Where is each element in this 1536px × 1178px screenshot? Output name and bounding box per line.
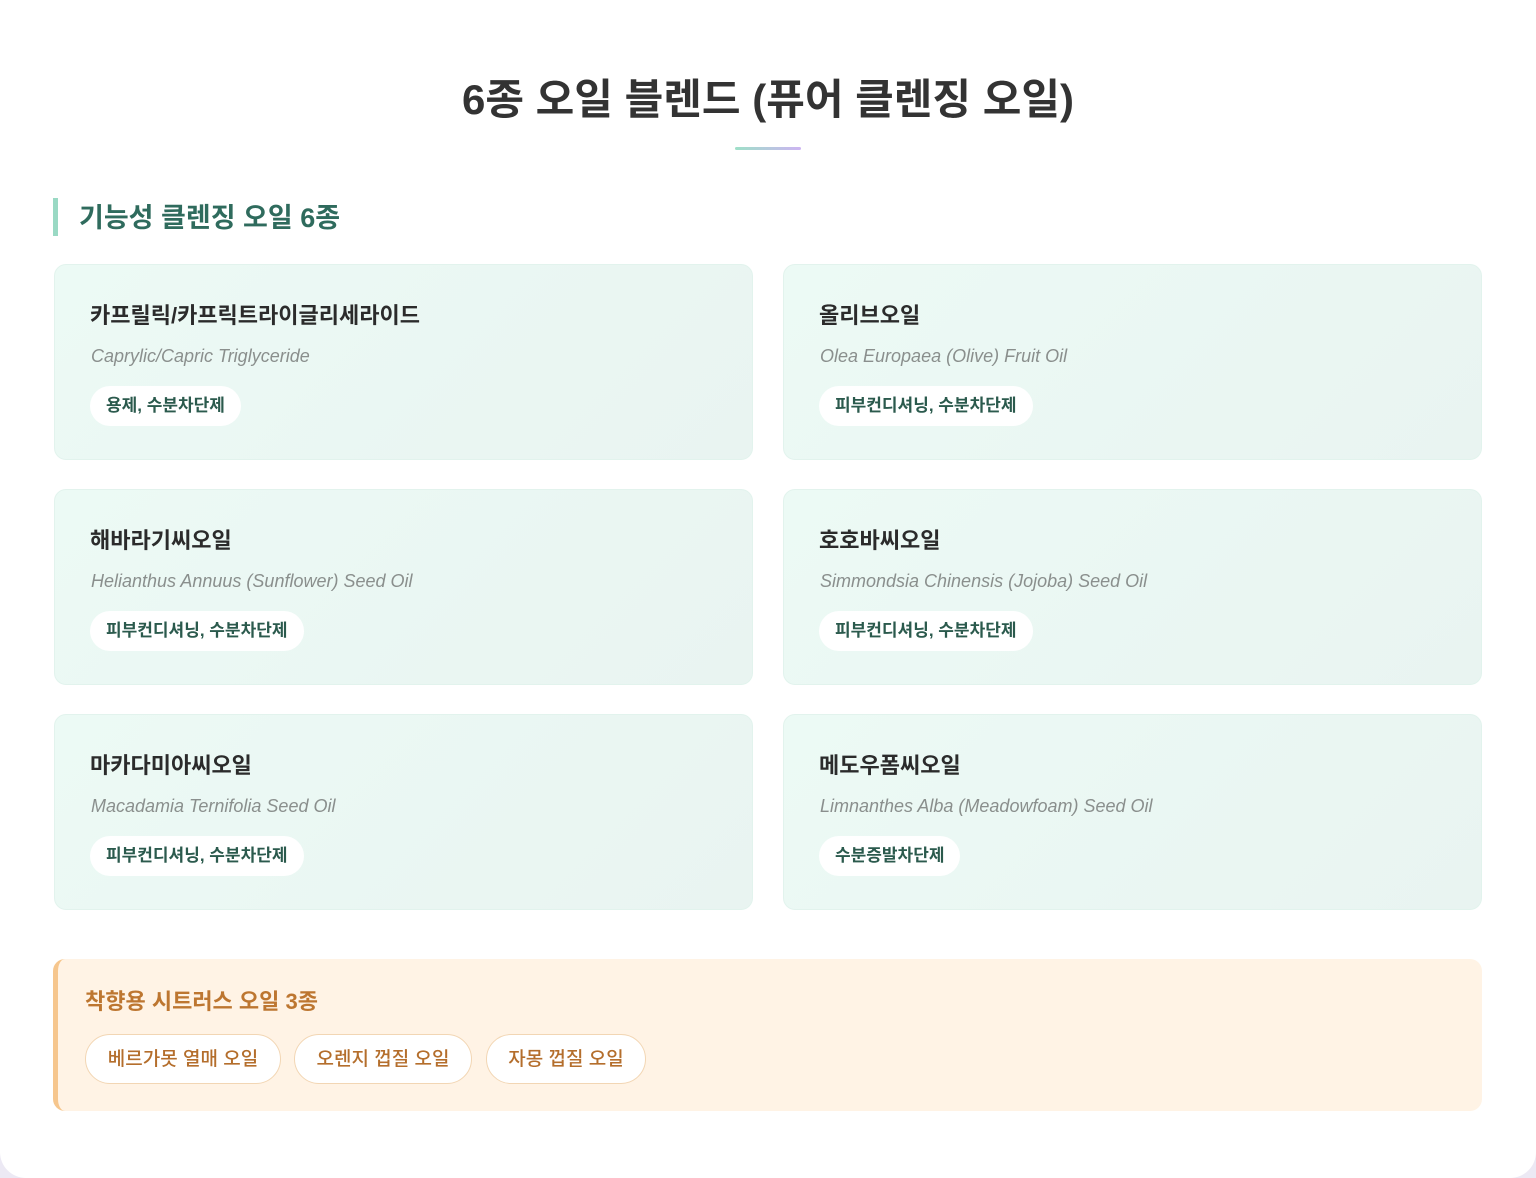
- pill: orange: 오렌지 껍질 오일: [317, 1049, 449, 1070]
- card: caprylic: 용제, 수분차단제: [106, 396, 225, 415]
- card: meadowfoam: [783, 714, 1482, 910]
- pill: bergamot: 베르가못 열매 오일: [108, 1049, 258, 1070]
- card: caprylic: 카프릴릭/카프릭트라이글리세라이드: [90, 303, 420, 328]
- card: meadowfoam: 메도우폼씨오일: [819, 753, 961, 778]
- card: olive: 올리브오일: [819, 303, 920, 328]
- section heading: functional oils: 기능성 클렌징 오일 6종: [79, 203, 340, 233]
- card: caprylic: [54, 264, 753, 460]
- card: jojoba: 피부컨디셔닝, 수분차단제: [835, 621, 1016, 640]
- card: jojoba: [783, 489, 1482, 685]
- pill: bergamot: [85, 1034, 281, 1084]
- card: olive: 피부컨디셔닝, 수분차단제: [835, 396, 1016, 415]
- card: jojoba: Simmondsia Chinensis (Jojoba) Seed Oil: [820, 571, 1147, 591]
- card: sunflower: Helianthus Annuus (Sunflower) Seed Oil: [91, 571, 413, 591]
- card: macadamia: 마카다미아씨오일: [90, 753, 252, 778]
- citrus heading: 착향용 시트러스 오일 3종: [85, 989, 318, 1014]
- card: sunflower: 피부컨디셔닝, 수분차단제: [106, 621, 288, 640]
- card: sunflower: [54, 489, 753, 685]
- card: meadowfoam: 수분증발차단제: [835, 846, 944, 865]
- card: olive: Olea Europaea (Olive) Fruit Oil: [820, 346, 1067, 366]
- pill: grapefruit: [486, 1034, 646, 1084]
- card: macadamia: [54, 714, 753, 910]
- title: 6종 오일 블렌드 (퓨어 클렌징 오일): [462, 76, 1074, 123]
- pill: grapefruit: 자몽 껍질 오일: [508, 1049, 624, 1070]
- card: caprylic: Caprylic/Capric Triglyceride: [91, 346, 310, 366]
- card: olive: [783, 264, 1482, 460]
- pill: orange: [294, 1034, 472, 1084]
- card: jojoba: 호호바씨오일: [819, 528, 940, 553]
- card: meadowfoam: Limnanthes Alba (Meadowfoam) Seed Oil: [820, 796, 1152, 816]
- card: macadamia: 피부컨디셔닝, 수분차단제: [106, 846, 288, 865]
- card: sunflower: 해바라기씨오일: [90, 528, 232, 553]
- panel: citrus oils: [53, 959, 1482, 1111]
- card: macadamia: Macadamia Ternifolia Seed Oil: [91, 796, 335, 816]
